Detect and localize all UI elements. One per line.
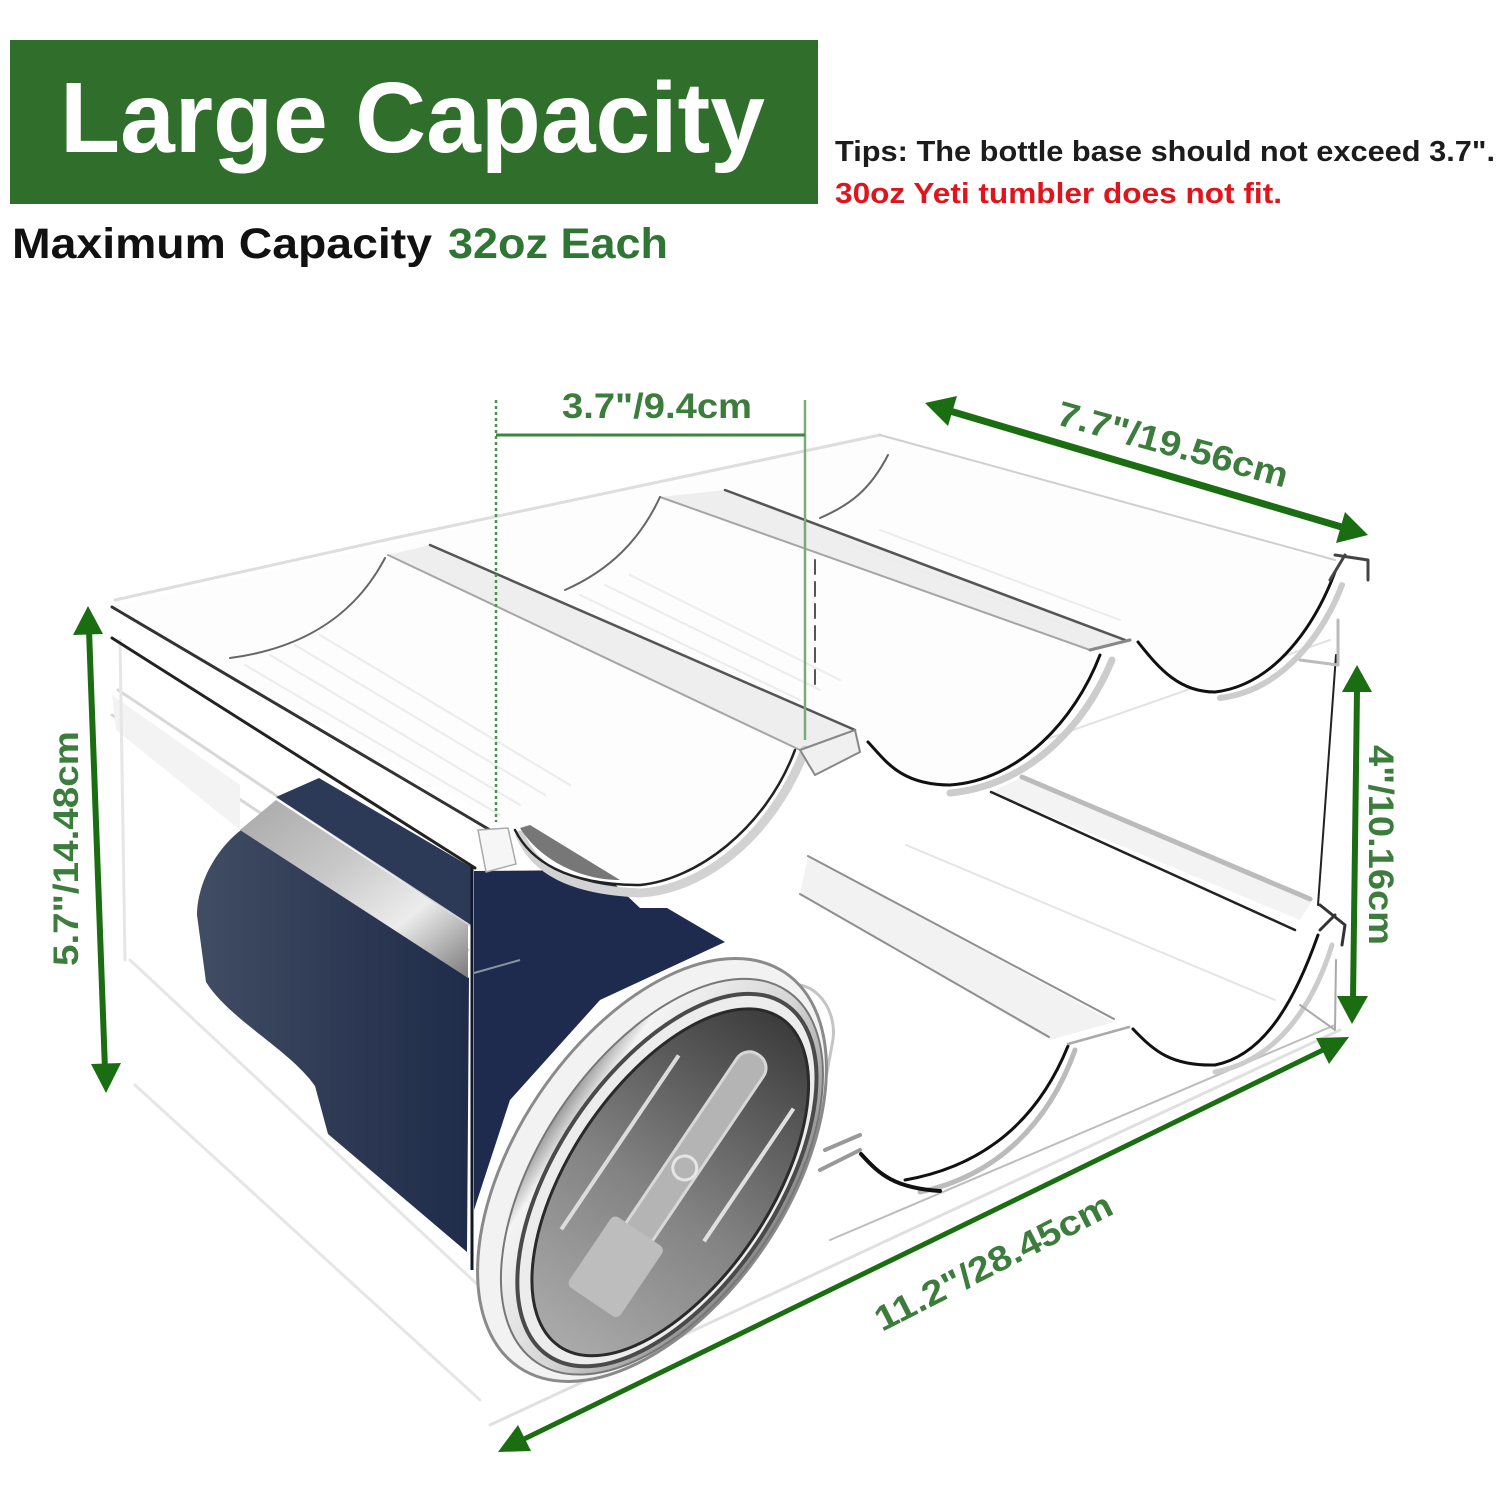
dimension: tier height 4 inches <box>1337 665 1400 1024</box>
dimension: length 11.2 inches: 11.2"/28.45cm <box>868 1185 1119 1339</box>
maximum capacity subheading: Maximum Capacity <box>12 220 432 268</box>
maximum capacity subheading <box>12 220 668 268</box>
heading banner: Large Capacity <box>60 62 765 174</box>
maximum capacity subheading: 32oz Each <box>448 220 668 268</box>
product: clear rack lower tier and base <box>112 640 1345 1425</box>
dimension: length 11.2 inches <box>498 1037 1349 1452</box>
tips text: 30oz Yeti tumbler does not fit. <box>835 178 1282 210</box>
product: clear rack upper tier <box>112 432 1368 893</box>
dimension: depth 7.7 inches: 7.7"/19.56cm <box>1053 394 1293 495</box>
dimension: tier height 4 inches: 4"/10.16cm <box>1361 745 1400 945</box>
product: tumbler lid <box>406 897 898 1443</box>
product: tumbler lid tab <box>800 985 833 1110</box>
dimension: overall height 5.7 inches <box>47 606 121 1093</box>
dimension: depth 7.7 inches <box>925 394 1368 543</box>
product: navy tumbler body <box>197 778 725 1270</box>
dimension: bottle base width 3.7 inches: 3.7"/9.4cm <box>562 387 752 426</box>
dimension: overall height 5.7 inches: 5.7"/14.48cm <box>47 731 86 966</box>
tips text: Tips: The bottle base should not exceed 3.7". <box>835 136 1495 168</box>
heading banner <box>10 40 818 204</box>
tips text <box>835 136 1495 210</box>
